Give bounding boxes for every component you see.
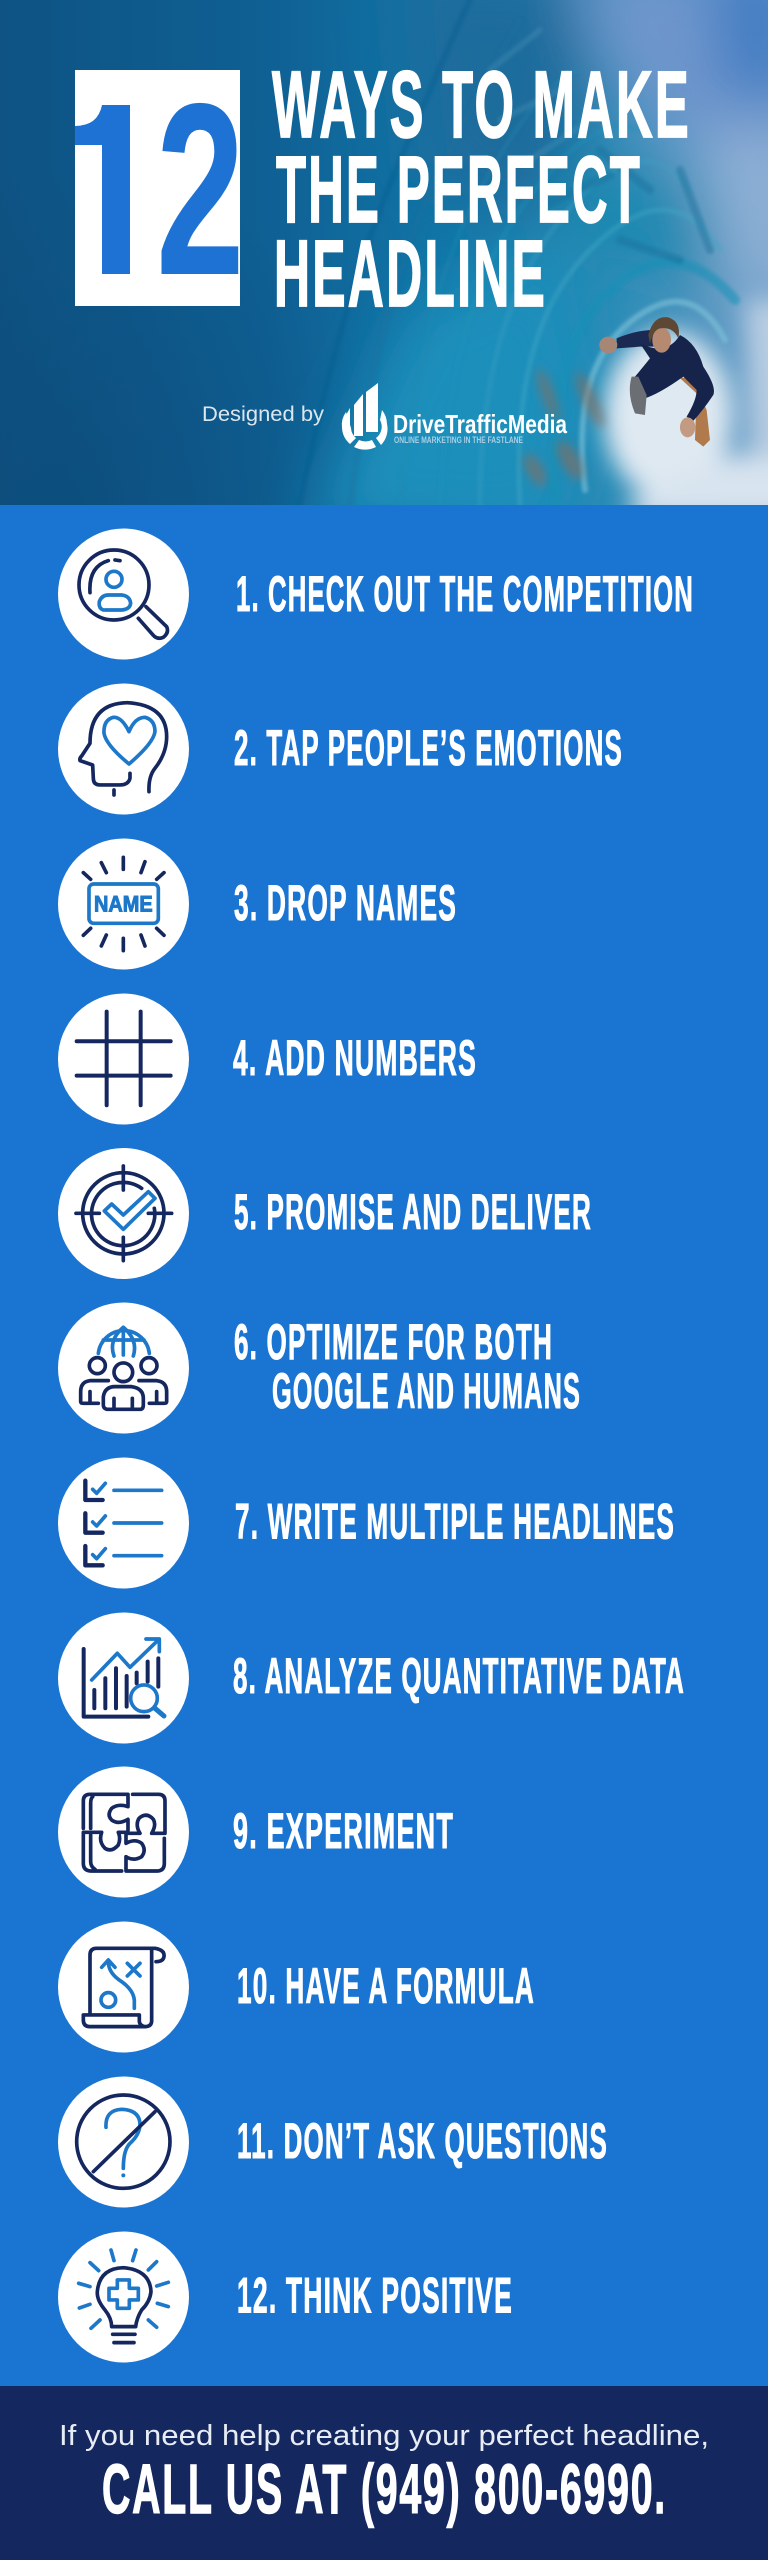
number box: 12: 1 xyxy=(59,53,168,327)
panel: list background xyxy=(0,505,768,2386)
icon: crossed question mark xyxy=(58,2076,189,2208)
item 5: promise and deliver xyxy=(58,1148,592,1279)
icon: play scroll xyxy=(58,1922,189,2052)
icon: target with check xyxy=(58,1148,189,1279)
number box: 12 xyxy=(75,70,240,306)
item 2: tap people's emotions xyxy=(58,684,623,814)
icon: name badge: NAME xyxy=(94,891,153,916)
photo: surfer in wave xyxy=(0,0,768,540)
item 12: think positive xyxy=(58,2232,513,2362)
icon: puzzle xyxy=(58,1766,189,1898)
footer prompt text: If you need help creating your perfect headline, xyxy=(59,2420,709,2452)
text: 3. DROP NAMES xyxy=(234,875,457,931)
icon: hash xyxy=(58,994,189,1124)
item 10: have a formula xyxy=(58,1922,535,2052)
item 9: experiment xyxy=(58,1766,454,1898)
logo: Drive Traffic Media: ONLINE MARKETING IN THE FASTLANE xyxy=(394,435,523,445)
number box: 12: 2 xyxy=(156,52,245,326)
item 4: add numbers xyxy=(58,994,477,1124)
item 11: don't ask questions xyxy=(58,2076,608,2208)
icon: checklist xyxy=(58,1458,189,1588)
logo icon: buildings in ring xyxy=(342,383,388,450)
text: 9. EXPERIMENT xyxy=(233,1803,454,1859)
item 7: write multiple headlines xyxy=(58,1458,675,1588)
item 8: analyze quantitative data xyxy=(58,1612,685,1744)
logo: Drive Traffic Media: DriveTrafficMedia xyxy=(393,409,567,439)
icon: chart with magnifier xyxy=(58,1612,189,1744)
text xyxy=(234,1314,581,1419)
icon: globe and people xyxy=(58,1302,189,1434)
designed by label: Designed by xyxy=(202,403,325,426)
item 1: check out the competition xyxy=(58,528,694,660)
panel: footer xyxy=(0,2386,768,2560)
item 3: drop names xyxy=(58,838,457,970)
surfer figure xyxy=(599,317,714,447)
icon: head with heart xyxy=(58,684,189,814)
item 6: optimize for both google and humans xyxy=(58,1302,581,1434)
text: 12. THINK POSITIVE xyxy=(237,2268,513,2324)
icon: name badge xyxy=(58,838,189,970)
panel: header xyxy=(0,0,768,540)
icon: magnifier over person xyxy=(58,528,189,660)
logo: Drive Traffic Media xyxy=(342,383,567,450)
text: 4. ADD NUMBERS xyxy=(233,1030,477,1086)
icon: light bulb with plus xyxy=(58,2232,189,2362)
title xyxy=(271,70,688,308)
